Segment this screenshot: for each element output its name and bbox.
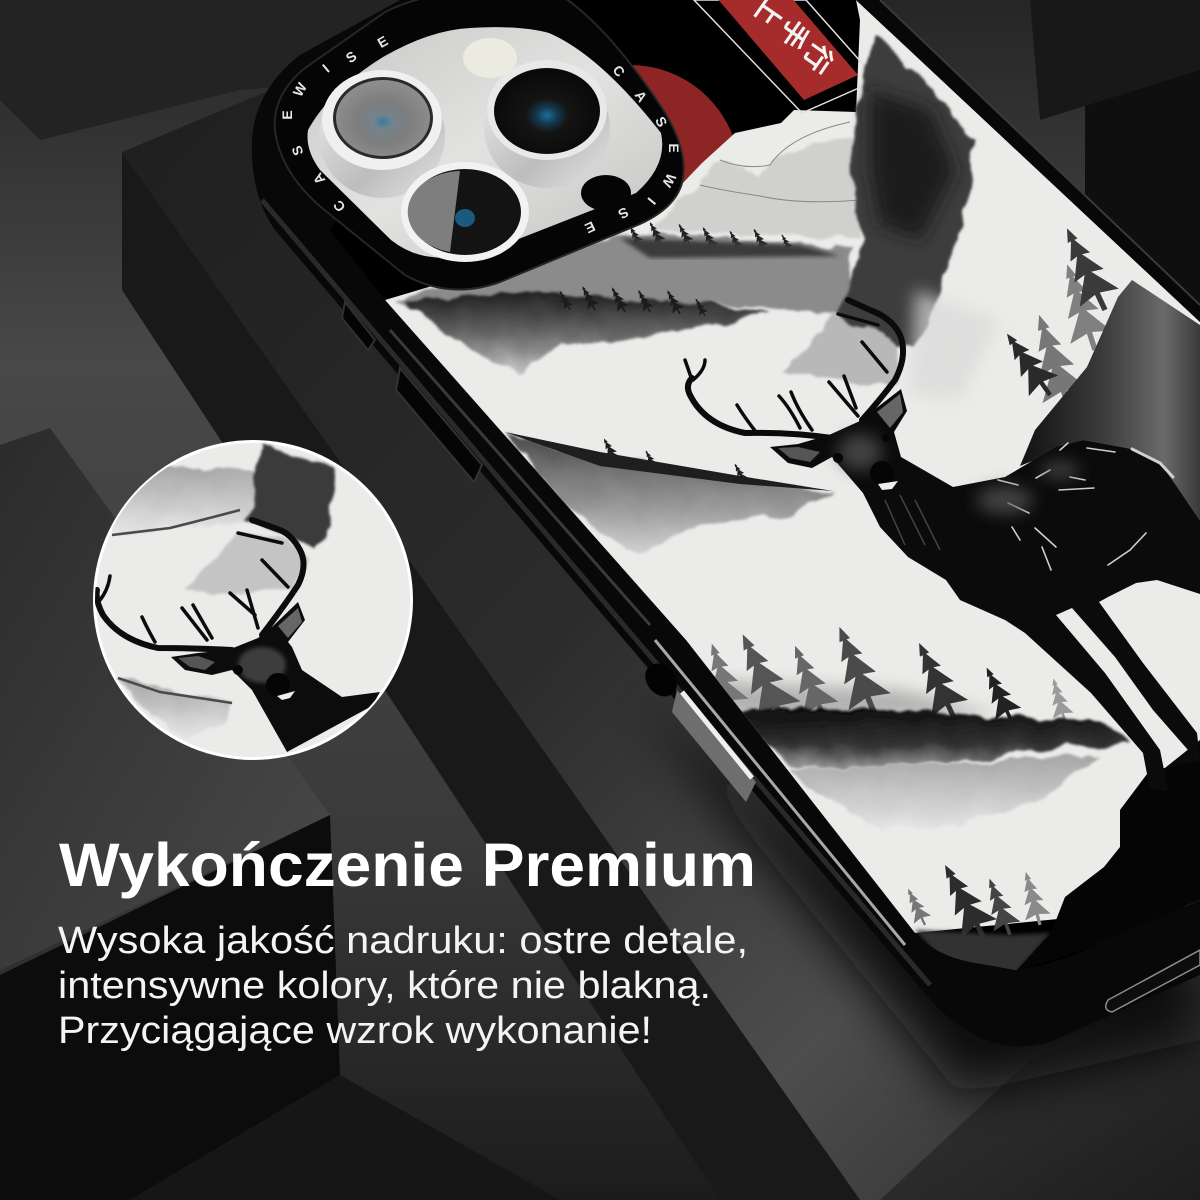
inset band xyxy=(118,678,232,737)
deer mane xyxy=(885,495,940,550)
body text: intensywne kolory, które nie blakną. xyxy=(58,965,711,1007)
bottom pines xyxy=(908,865,1050,936)
deer highlights xyxy=(998,443,1173,570)
ring text: CASEWISE: A xyxy=(309,170,328,188)
deer body and legs xyxy=(770,389,1200,790)
printed design: ink landscape xyxy=(385,0,1200,970)
right dark hillside xyxy=(1020,280,1200,530)
side button: upper xyxy=(396,368,482,482)
upper hill wash xyxy=(395,232,850,315)
mountain core xyxy=(870,90,955,240)
ring text: CASEWISE: S xyxy=(288,144,306,158)
inset ridge line xyxy=(112,510,240,703)
inset face details xyxy=(178,608,302,700)
inset antlers xyxy=(97,520,304,650)
pines on right xyxy=(1007,228,1119,403)
side button: lower xyxy=(639,657,756,802)
lower-left pines xyxy=(505,432,833,491)
red label: 手 xyxy=(773,13,815,54)
ring text: CASEWISE: E xyxy=(279,110,295,120)
inset: magnified deer detail xyxy=(93,440,413,760)
deer body shading xyxy=(838,434,1080,514)
red sun xyxy=(632,65,732,183)
left antler xyxy=(685,360,832,438)
ring text: CASEWISE: C xyxy=(330,197,349,215)
ring text: CASEWISE: S xyxy=(652,114,671,130)
deer on phone xyxy=(685,300,1200,790)
dark lake band xyxy=(735,709,1130,768)
ring text: CASEWISE xyxy=(279,32,682,237)
body text: Przyciągające wzrok wykonanie! xyxy=(58,1010,652,1052)
rock under deer xyxy=(1015,740,1200,972)
ring text: CASEWISE: W xyxy=(659,171,680,191)
lens: bottom xyxy=(401,162,529,262)
lens: left xyxy=(319,70,445,198)
dark ink mountain xyxy=(835,35,975,345)
paper background xyxy=(385,0,1200,933)
middle hill wash xyxy=(405,292,770,372)
ridge lines xyxy=(700,122,860,202)
lens: right xyxy=(484,60,610,188)
cloud behind antlers xyxy=(782,312,900,385)
lower-left hill wash xyxy=(505,435,835,555)
far ridge xyxy=(650,135,860,240)
ring text: CASEWISE: I xyxy=(319,61,332,76)
ring text: CASEWISE: W xyxy=(289,79,310,99)
inset upper-left wash xyxy=(110,465,262,533)
upper pines xyxy=(620,219,840,258)
distant pines xyxy=(711,627,1074,720)
side switch xyxy=(342,302,375,350)
ring text: CASEWISE: S xyxy=(343,48,360,66)
camera island xyxy=(275,0,684,290)
right antler xyxy=(829,300,903,420)
inset cloud xyxy=(185,533,305,593)
charging port xyxy=(1106,950,1200,1012)
ring text: CASEWISE: S xyxy=(615,204,632,223)
red label xyxy=(694,0,877,113)
ring text: CASEWISE: E xyxy=(374,32,391,51)
pale mist below mountain xyxy=(910,290,1000,400)
inset deer xyxy=(171,602,380,752)
pale water wash xyxy=(790,755,1100,830)
inset dark wash xyxy=(248,445,335,550)
camera plate xyxy=(308,27,662,258)
ring text: CASEWISE: C xyxy=(610,62,628,80)
red label: 行 xyxy=(797,36,840,78)
ring text: CASEWISE: E xyxy=(666,143,682,153)
bottom ground wash xyxy=(915,930,1051,975)
headline: Wykończenie Premium xyxy=(59,831,756,899)
ring text: CASEWISE: I xyxy=(644,195,659,208)
body text: Wysoka jakość nadruku: ostre detale, xyxy=(58,920,748,962)
ring text: CASEWISE: A xyxy=(632,87,651,105)
phone case body xyxy=(252,0,1200,1046)
lidar sensor xyxy=(581,175,631,211)
flash xyxy=(463,38,517,78)
ring text: CASEWISE: E xyxy=(582,218,598,237)
middle pines xyxy=(560,286,708,316)
deer face xyxy=(778,394,903,490)
body text xyxy=(58,920,748,1052)
